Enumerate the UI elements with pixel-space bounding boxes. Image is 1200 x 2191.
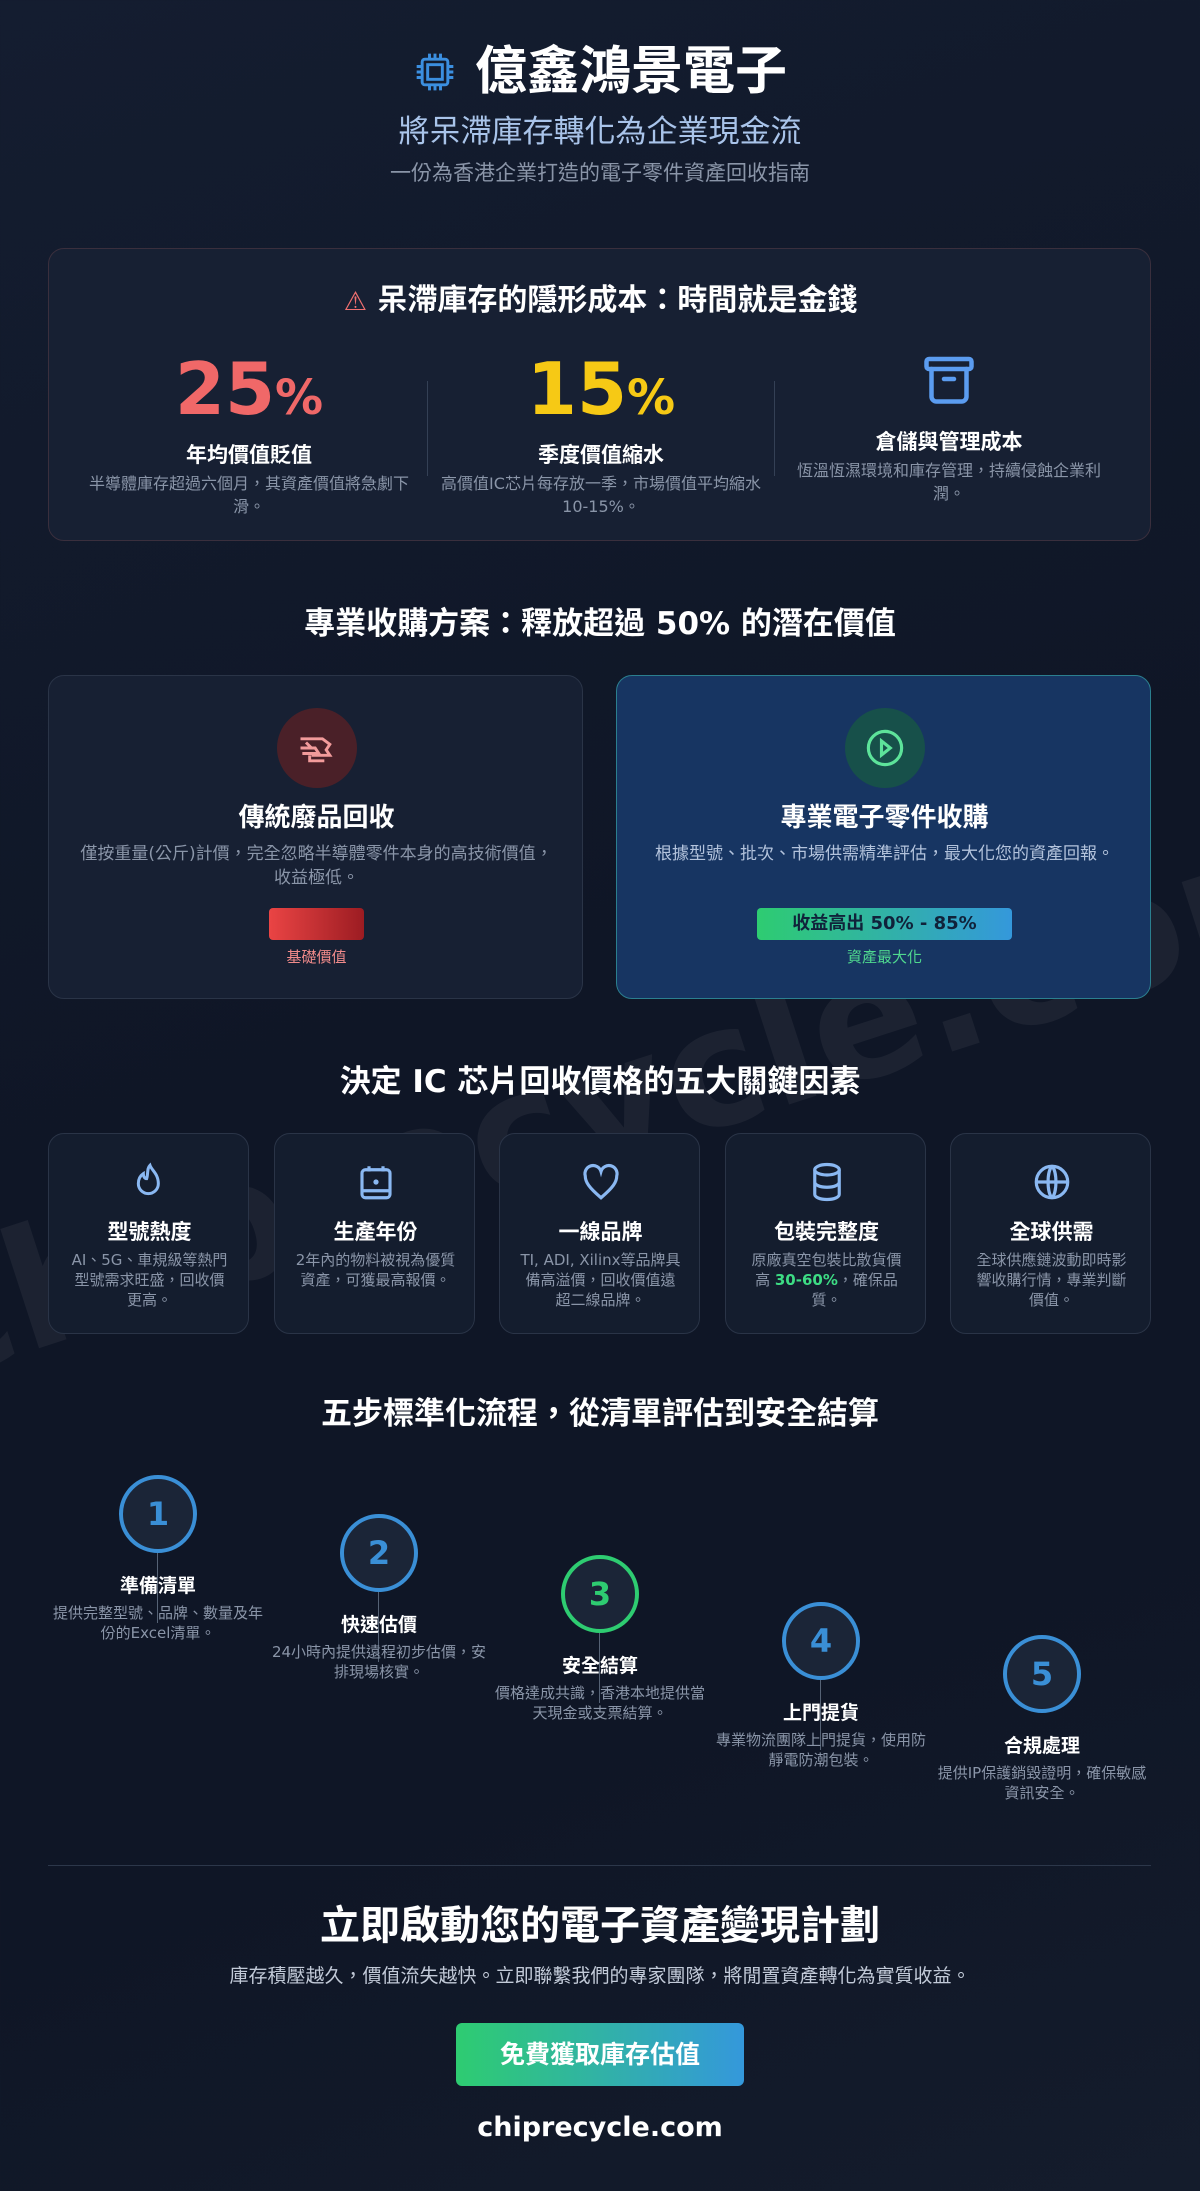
step 3 (495, 1555, 705, 1722)
stat 1: 25% (175, 347, 323, 431)
icon: archive (924, 356, 974, 404)
step 1 (53, 1475, 263, 1642)
CTA (229, 1903, 970, 1987)
stat 3: 倉儲與管理成本 (876, 430, 1022, 454)
label: 基礎價值 (286, 948, 346, 966)
process steps: 1 (147, 1495, 169, 1533)
factor: supply (950, 1133, 1151, 1334)
process steps: 2 (368, 1534, 390, 1572)
process steps: 準備清單 (120, 1575, 196, 1597)
factor: packaging (725, 1133, 926, 1334)
stat 2: 季度價值縮水 (538, 443, 664, 467)
bar (269, 908, 364, 940)
heading: factors: 決定 IC 芯片回收價格的五大關鍵因素 (340, 1064, 860, 1100)
panel: hidden costs (48, 248, 1151, 541)
bar: 收益高出 50% - 85% (792, 913, 977, 934)
label: 資產最大化 (847, 948, 922, 966)
desc: 僅按重量(公斤)計價，完全忽略半導體零件本身的高技術價值，收益極低。 (80, 844, 553, 888)
step 2 (272, 1514, 486, 1681)
header (390, 42, 810, 185)
stat 1 (89, 347, 409, 516)
process steps: 上門提貨 (783, 1702, 859, 1724)
icon: scrap (277, 708, 357, 788)
button (456, 2023, 744, 2086)
CTA heading: 立即啟動您的電子資產變現計劃 (320, 1903, 880, 1949)
factor: packaging: 包裝完整度 (774, 1220, 879, 1244)
factor: year: 2年內的物料被視為優質資產，可獲最高報價。 (296, 1251, 455, 1289)
stat 3 (797, 356, 1101, 503)
CTA text: 庫存積壓越久，價值流失越快。立即聯繫我們的專家團隊，將閒置資產轉化為實質收益。 (229, 1965, 970, 1987)
tagline: 一份為香港企業打造的電子零件資產回收指南 (390, 161, 810, 185)
title: 億鑫鴻景電子 (475, 42, 787, 102)
icon: play (845, 708, 925, 788)
process steps: 4 (810, 1622, 832, 1660)
title: 專業電子零件收購 (780, 803, 988, 833)
process steps: 24小時內提供遠程初步估價，安排現場核實。 (272, 1643, 486, 1681)
process steps: 提供完整型號、品牌、數量及年份的Excel清單。 (53, 1604, 263, 1642)
step 5 (938, 1635, 1146, 1802)
factor cards (48, 1133, 1151, 1334)
process steps: 合規處理 (1004, 1735, 1080, 1757)
factor: year: 生產年份 (334, 1220, 418, 1244)
stat 2: 高價值IC芯片每存放一季，市場價值平均縮水10-15%。 (441, 474, 761, 516)
factor: hot model: 型號熱度 (108, 1220, 192, 1244)
subtitle: 將呆滯庫存轉化為企業現金流 (398, 114, 802, 150)
stat 2 (441, 347, 761, 516)
factor: brand (499, 1133, 700, 1334)
domain: chiprecycle.com (477, 2112, 723, 2143)
factor: hot model (48, 1133, 249, 1334)
heading: solution: 專業收購方案：釋放超過 50% 的潛在價值 (304, 606, 896, 642)
process steps: 5 (1031, 1655, 1053, 1693)
factor: brand: TI, ADI, Xilinx等品牌具備高溢價，回收價值遠超二線品牌。 (520, 1251, 681, 1309)
panel: traditional (48, 675, 583, 999)
heading: process: 五步標準化流程，從清單評估到安全結算 (321, 1396, 879, 1432)
factor: hot model: AI、5G、車規級等熱門型號需求旺盛，回收價更高。 (72, 1251, 227, 1309)
factor: year (274, 1133, 475, 1334)
factor: supply: 全球供應鏈波動即時影響收購行情，專業判斷價值。 (976, 1251, 1126, 1309)
stat 1: 年均價值貶值 (186, 443, 312, 467)
process steps: 3 (589, 1575, 611, 1613)
step 4 (716, 1602, 926, 1769)
process steps: 安全結算 (562, 1655, 638, 1677)
process steps: 提供IP保護銷毀證明，確保敏感資訊安全。 (938, 1764, 1146, 1802)
stat 1: 半導體庫存超過六個月，其資產價值將急劇下滑。 (89, 474, 409, 516)
process steps: 快速估價 (341, 1614, 417, 1636)
icon: chip (416, 54, 454, 90)
stat 3: 恆溫恆濕環境和庫存管理，持續侵蝕企業利潤。 (797, 461, 1101, 503)
factor: packaging: 原廠真空包裝比散貨價高 30-60%，確保品質。 (751, 1251, 902, 1309)
desc: 根據型號、批次、市場供需精準評估，最大化您的資產回報。 (655, 844, 1114, 864)
factor: brand: 一線品牌 (558, 1220, 642, 1244)
process steps (53, 1475, 1146, 1802)
stat 2: 15% (527, 347, 675, 431)
process steps: 價格達成共識，香港本地提供當天現金或支票結算。 (495, 1684, 705, 1722)
button: 免費獲取庫存估值 (500, 2040, 700, 2069)
factor: supply: 全球供需 (1010, 1220, 1094, 1244)
title: 傳統廢品回收 (238, 803, 394, 833)
process steps: 專業物流團隊上門提貨，使用防靜電防潮包裝。 (716, 1731, 926, 1769)
bar (757, 908, 1012, 940)
heading: ⚠ 呆滯庫存的隱形成本：時間就是金錢 (344, 283, 857, 318)
panel: professional (616, 675, 1151, 999)
